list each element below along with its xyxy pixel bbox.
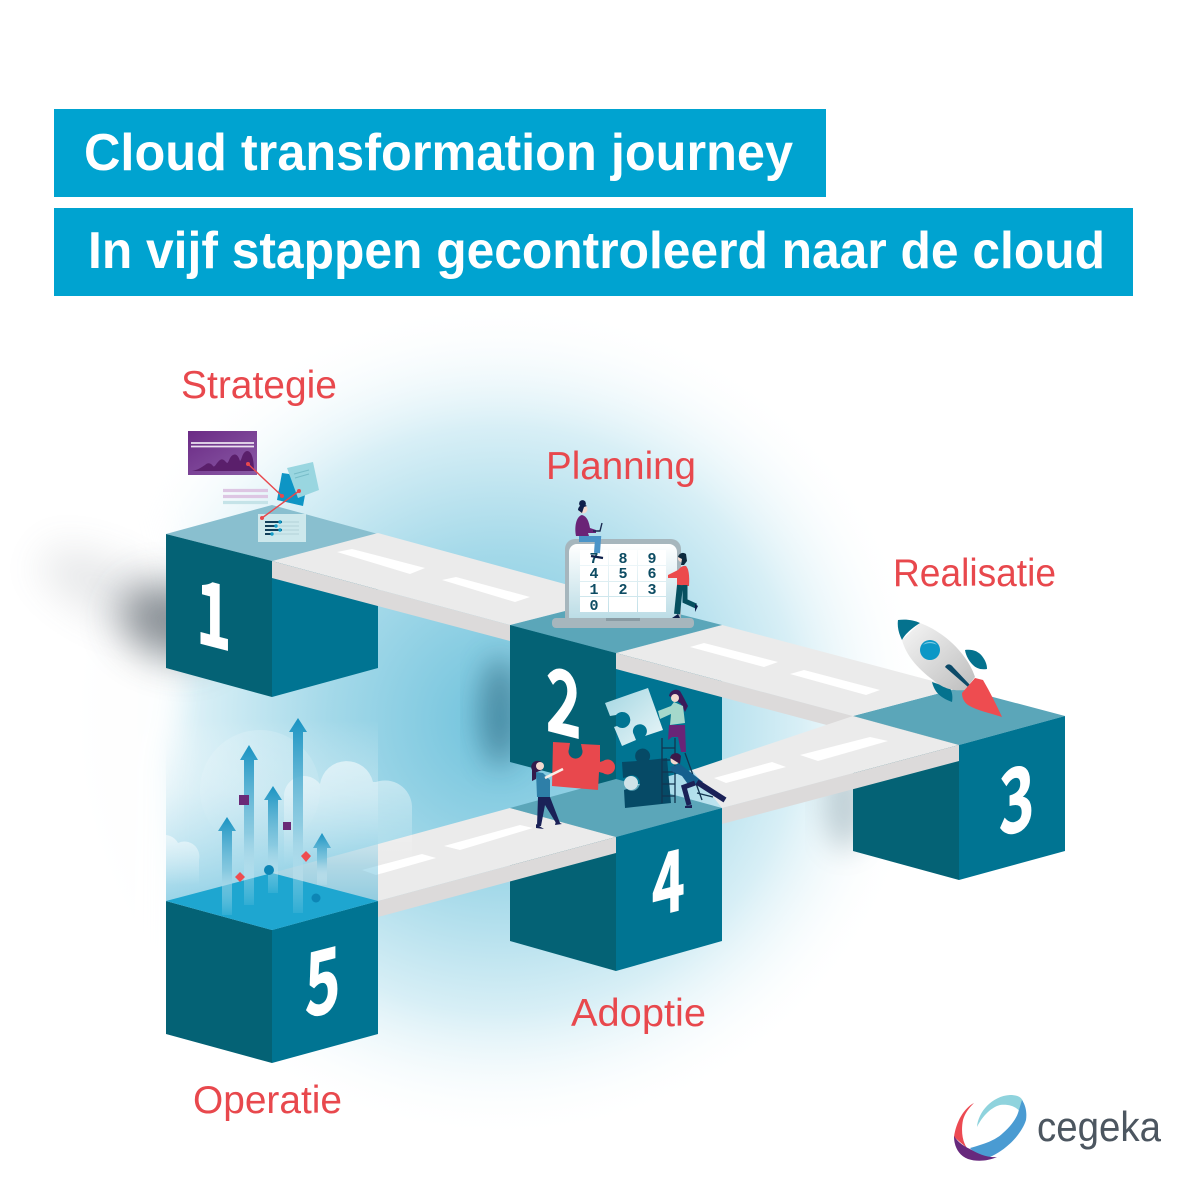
red puzzle piece: [552, 742, 615, 790]
woman with red piece: [531, 761, 563, 829]
chart card: [188, 431, 257, 475]
block 5: [166, 901, 378, 1063]
clouds: [166, 730, 412, 885]
illustration: laptop with numbers: 0: [589, 598, 599, 615]
markers: [239, 795, 249, 805]
aqua note: [287, 462, 319, 498]
illustration: laptop with numbers: 4: [589, 566, 599, 583]
notch backing: [624, 776, 638, 790]
blue card: [277, 473, 305, 506]
road 4 to 3: [692, 716, 959, 824]
illustration: cloud growth arrows: [166, 718, 412, 930]
figure: man at laptop: [668, 553, 698, 618]
illustration: laptop with numbers: 2: [618, 582, 628, 599]
label: Strategie: Strategie: [181, 364, 337, 407]
illustration: laptop with numbers: 6: [647, 566, 657, 583]
road 5 to 4: [272, 808, 616, 917]
title bar 1: Cloud transformation journey: [84, 124, 793, 182]
woman with light piece: [658, 690, 688, 752]
ladder: [662, 738, 713, 803]
illustration: strategy documents: [188, 431, 319, 542]
illustration: laptop with numbers: [552, 539, 694, 628]
background glow: [0, 300, 930, 1160]
number 3: 3: [999, 725, 1034, 861]
number 5: 5: [305, 907, 340, 1043]
title bar 2: In vijf stappen gecontroleerd naar de cloud: [88, 222, 1105, 280]
block 1: [166, 505, 378, 697]
label: Realisatie: Realisatie: [893, 552, 1056, 595]
dark puzzle piece: [622, 749, 671, 808]
block 2: [510, 598, 722, 790]
block 3: [853, 688, 1065, 880]
light puzzle piece: [605, 688, 663, 746]
illustration: laptop with numbers: 5: [618, 566, 628, 583]
label: Planning: Planning: [546, 445, 696, 488]
road 1 to 2: [272, 533, 616, 641]
title bar 2: [54, 208, 1133, 296]
text lines: [223, 490, 268, 496]
illustration: laptop with numbers: 3: [647, 582, 657, 599]
number 2: 2: [546, 628, 581, 765]
illustration: laptop with numbers: 9: [647, 551, 657, 568]
logo swoosh: [954, 1095, 1026, 1161]
figure: woman on laptop: [575, 500, 603, 558]
number 1: 1: [196, 540, 231, 677]
illustration: laptop with numbers: 7: [589, 551, 599, 568]
label: Adoptie: Adoptie: [571, 992, 706, 1035]
number 4: 4: [652, 812, 685, 942]
logo: cegeka: [954, 1095, 1162, 1161]
slider panel: [258, 514, 306, 542]
illustration: laptop with numbers: 1: [589, 582, 599, 599]
illustration: laptop with numbers: 8: [618, 551, 628, 568]
arrows: [218, 718, 331, 915]
illustration: puzzle team: [531, 688, 725, 829]
icon: rocket: [898, 620, 1002, 717]
road 2 to 3: [616, 625, 959, 732]
logo wordmark: cegeka: [1037, 1103, 1162, 1150]
man pushing: [670, 753, 725, 808]
label: Operatie: Operatie: [193, 1079, 342, 1122]
title bar 1: [54, 109, 826, 197]
connector lines: [248, 464, 299, 518]
block 4: [510, 779, 722, 971]
